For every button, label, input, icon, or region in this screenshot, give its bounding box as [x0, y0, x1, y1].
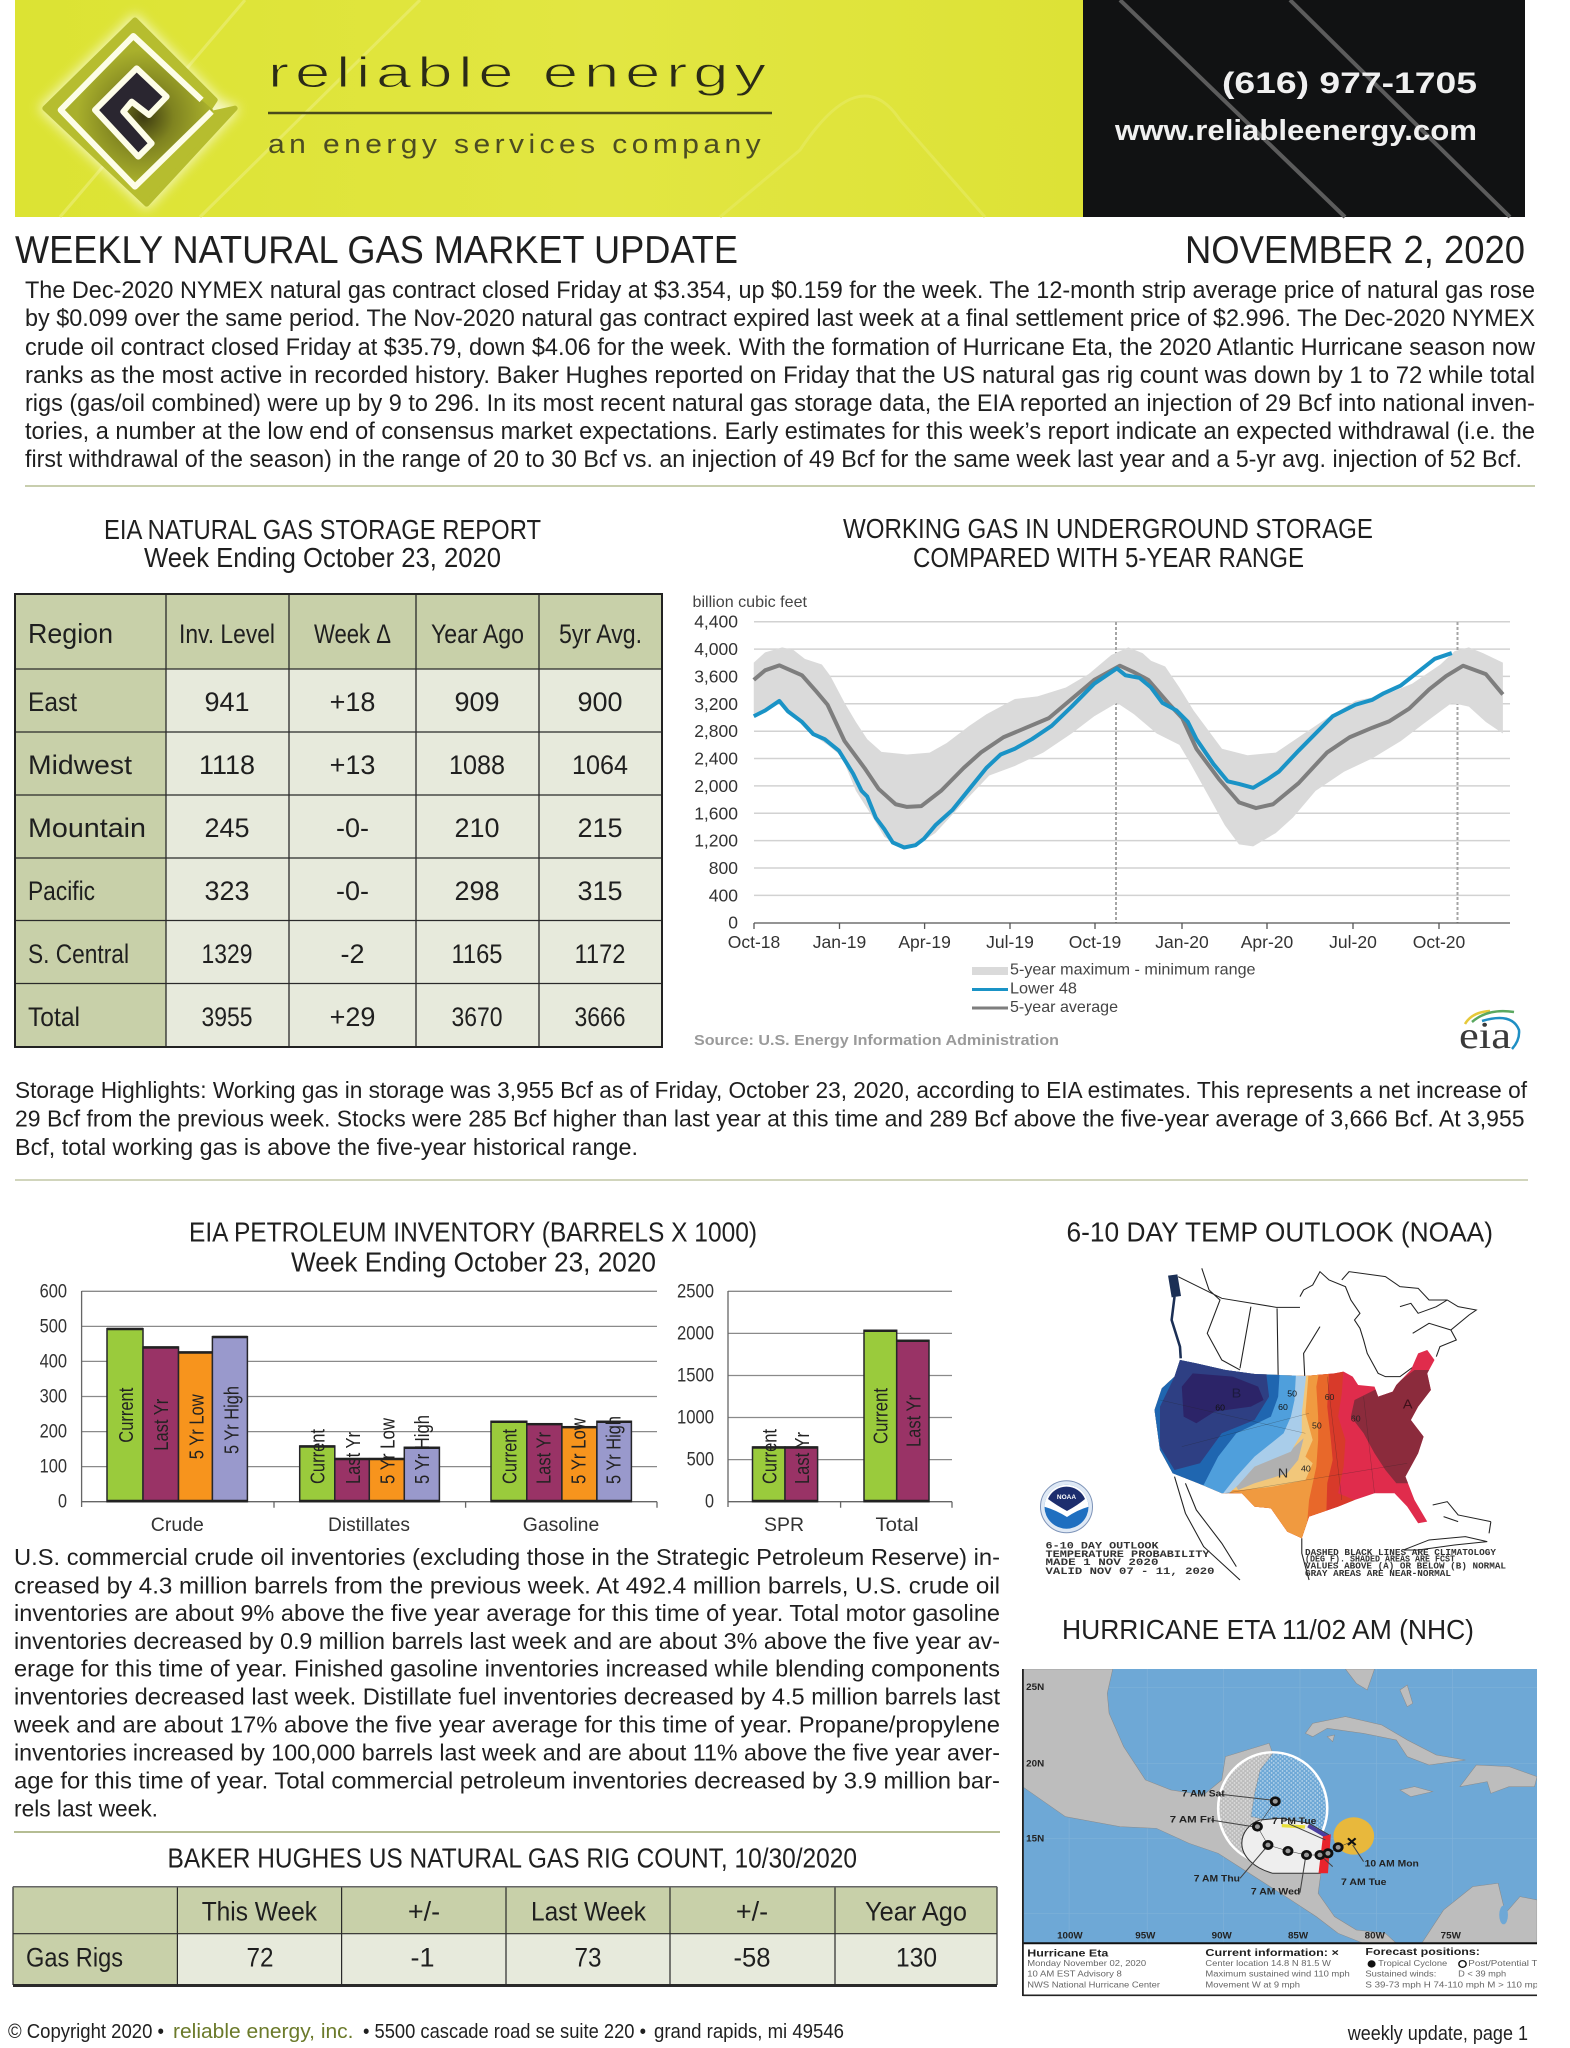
bar chart: crude, distillates, gasoline: 200 — [40, 1422, 67, 1443]
track time labels: 10 AM Mon — [1365, 1858, 1419, 1869]
table: storage report: East — [28, 687, 77, 717]
petroleum text block: inventories decreased last week. Distillate fuel inventories decreased by 4.5 million barrels last — [14, 1684, 1000, 1710]
chart legend: Lower 48 — [1010, 981, 1077, 998]
rotated bar labels: Current — [306, 1429, 330, 1484]
table: storage report: 1165 — [452, 939, 502, 969]
5-year range band — [754, 647, 1503, 846]
icon: NOAA logo — [1040, 1481, 1092, 1533]
rotated bar labels: Last Yr — [902, 1395, 926, 1447]
bars: gasoline — [491, 1421, 631, 1502]
table: storage report: 315 — [577, 876, 623, 906]
map caption right: (DEG F). SHADED AREAS ARE FCST — [1305, 1555, 1456, 1565]
map caption left — [1046, 1541, 1214, 1578]
table: rig count: -58 — [734, 1943, 770, 1973]
line chart: working gas in storage: 400 — [709, 885, 738, 905]
table: storage report: -2 — [340, 939, 365, 969]
hurricane info box: Post/Potential TC — [1468, 1958, 1545, 1968]
lat lon labels: 95W — [1135, 1930, 1156, 1940]
table: storage report: 5yr Avg. — [559, 619, 642, 649]
bar chart: SPR and total: 0 — [705, 1492, 714, 1513]
map caption left: TEMPERATURE PROBABILITY — [1046, 1550, 1210, 1561]
map: NOAA temperature outlook: 60 — [1278, 1402, 1288, 1412]
storage highlights text — [15, 1077, 1527, 1160]
map caption right — [1305, 1548, 1506, 1579]
intro text block: The Dec-2020 NYMEX natural gas contract closed Friday at $3.354, up $0.159 for the week. The 12-month strip average price of natural gas rose — [25, 277, 1535, 304]
heading: petroleum inventory: Week Ending October 23, 2020 — [291, 1247, 656, 1278]
chart legend — [972, 962, 1256, 1016]
storage highlights text: 29 Bcf from the previous week. Stocks were 285 Bcf higher than last year at this time and 289 Bcf above the five-year average of 3,666 Bcf. At 3,955 — [15, 1106, 1524, 1132]
bar chart: crude, distillates, gasoline: 600 — [40, 1281, 67, 1302]
table: rig count: 73 — [574, 1943, 602, 1973]
table: storage report: 909 — [454, 687, 500, 717]
storage highlights text: Storage Highlights: Working gas in storage was 3,955 Bcf as of Friday, October 23, 2020, according to EIA estimates. This represents a net increase of — [15, 1077, 1527, 1103]
hurricane info box: S 39-73 mph H 74-110 mph M > 110 mph — [1365, 1980, 1544, 1989]
table: storage report: S. Central — [28, 939, 129, 969]
table: storage report: 3955 — [202, 1002, 252, 1032]
table: storage report: 3670 — [452, 1002, 502, 1032]
hurricane info box: Tropical Cyclone — [1378, 1958, 1447, 1968]
bar chart: SPR and total: 500 — [687, 1450, 714, 1471]
line chart: working gas in storage: 2,400 — [694, 748, 738, 768]
rotated bar labels: 5 Yr Low — [568, 1418, 590, 1484]
heading: petroleum inventory — [189, 1217, 757, 1278]
rotated bar labels: Current — [498, 1429, 522, 1484]
table: storage report: 941 — [204, 687, 250, 717]
coastal warnings — [1282, 1824, 1305, 1829]
forecast cone — [1242, 1818, 1329, 1873]
map: NOAA temperature outlook: 60 — [1351, 1414, 1361, 1424]
rotated bar labels: Current — [758, 1429, 782, 1484]
intro text block: first withdrawal of the season) in the range of 20 to 30 Bcf vs. an injection of 49 Bcf for the same week last year and a 5-yr avg. injection of 52 Bcf. — [25, 446, 1522, 473]
table: storage report: 900 — [577, 687, 623, 717]
wind field — [1333, 1817, 1374, 1855]
table: storage report: 245 — [204, 813, 250, 843]
table: rig count: Last Week — [531, 1897, 646, 1927]
hurricane info box: Hurricane Eta — [1027, 1949, 1109, 1959]
footer copyright: grand rapids, mi 49546 — [654, 2020, 844, 2043]
bars: total — [864, 1330, 929, 1502]
petroleum text block — [13, 1544, 1000, 1822]
rotated bar labels: 5 Yr High — [220, 1386, 244, 1454]
table: rig count: +/- — [736, 1897, 768, 1927]
line chart: working gas in storage: 2,800 — [694, 721, 738, 741]
footer copyright: © Copyright 2020 • — [8, 2020, 164, 2043]
rotated bar labels — [115, 1386, 626, 1484]
map caption left: MADE 1 NOV 2020 — [1046, 1558, 1158, 1569]
bars: SPR — [752, 1447, 818, 1502]
rotated bar labels: Current — [115, 1387, 138, 1443]
bars: crude — [107, 1329, 247, 1502]
lat lon labels: 80W — [1365, 1930, 1385, 1940]
line chart: working gas in storage: Oct-18 — [728, 932, 780, 952]
hurricane info box: Maximum sustained wind 110 mph — [1205, 1969, 1350, 1979]
lat lon labels: 15N — [1026, 1833, 1044, 1844]
line chart: working gas in storage: 4,000 — [694, 639, 738, 659]
line chart: working gas in storage: 3,600 — [694, 666, 738, 686]
map: NOAA temperature outlook: 50 — [1287, 1389, 1297, 1399]
hurricane info box: Sustained winds: — [1365, 1969, 1436, 1979]
category labels: Crude — [151, 1515, 204, 1536]
heading: hurricane: HURRICANE ETA 11/02 AM (NHC) — [1062, 1614, 1474, 1645]
table: storage report: 1329 — [202, 939, 252, 969]
line chart: working gas in storage: 1,600 — [694, 803, 738, 823]
track time labels — [1170, 1788, 1419, 1896]
map: NOAA temperature outlook — [1040, 1268, 1506, 1580]
warm anomaly: maroon — [1351, 1370, 1436, 1483]
lat lon labels: 90W — [1212, 1930, 1232, 1940]
map caption right: VALUES ABOVE (A) OR BELOW (B) NORMAL — [1305, 1561, 1506, 1571]
lat lon labels: 20N — [1026, 1758, 1044, 1769]
table: storage report: 1172 — [574, 939, 626, 969]
heading: rig count: BAKER HUGHES US NATURAL GAS RIG COUNT, 10/30/2020 — [168, 1843, 857, 1874]
line chart: working gas in storage: billion cubic feet — [692, 594, 808, 611]
map caption right: DASHED BLACK LINES ARE CLIMATOLOGY — [1305, 1548, 1497, 1558]
table: rig count: 130 — [896, 1943, 937, 1973]
chart legend: 5-year maximum - minimum range — [1010, 962, 1256, 978]
rotated bar labels: Current — [870, 1388, 892, 1444]
rotated bar labels: Last Yr — [791, 1432, 814, 1484]
website: www.reliableenergy.com — [1114, 115, 1477, 147]
bars: distillates — [300, 1446, 439, 1502]
table: storage report: Year Ago — [431, 619, 524, 649]
line chart: working gas in storage: Apr-20 — [1241, 932, 1294, 952]
table: storage report: Week Δ — [314, 619, 391, 649]
map caption right: GRAY AREAS ARE NEAR-NORMAL — [1305, 1569, 1451, 1579]
intro text block: rigs (gas/oil combined) were up by 9 to 296. In its most recent natural gas storage data, the EIA reported an injection of 29 Bcf into national inven- — [25, 390, 1535, 417]
table: storage report: Mountain — [28, 813, 146, 843]
intro text block: tories, a number at the low end of consensus market expectations. Early estimates for this week’s report indicate an expected withdrawal (i.e. the — [25, 418, 1535, 445]
lat lon labels: 75W — [1441, 1930, 1461, 1940]
petroleum text block: week and are about 17% above the five year average for this time of year. Propane/propylene — [13, 1712, 1000, 1738]
intro text block — [25, 277, 1535, 473]
map: NOAA temperature outlook: A — [1403, 1396, 1413, 1411]
table: storage report: Midwest — [28, 750, 133, 780]
forecast position markers — [1253, 1798, 1342, 1859]
line chart: working gas in storage: Jul-19 — [986, 932, 1034, 952]
table: storage report: 1088 — [449, 750, 505, 780]
rotated bar labels: Last Yr — [342, 1432, 365, 1484]
line chart: working gas in storage: 800 — [709, 858, 738, 878]
track time labels: 7 AM Thu — [1194, 1873, 1240, 1884]
hurricane info box: Center location 14.8 N 81.5 W — [1205, 1958, 1331, 1968]
table: rig count: +/- — [408, 1897, 440, 1927]
rotated bar labels — [758, 1388, 926, 1484]
company tagline: an energy services company — [268, 129, 765, 159]
heading: temp outlook: 6-10 DAY TEMP OUTLOOK (NOAA) — [1066, 1217, 1493, 1248]
icon: company logo — [38, 13, 240, 210]
line chart: working gas in storage: Oct-20 — [1413, 932, 1466, 952]
map: NOAA temperature outlook: B — [1232, 1385, 1241, 1400]
bar chart: crude, distillates, gasoline: 0 — [58, 1492, 67, 1513]
petroleum text block: erage for this time of year. Finished gasoline inventories increased while blending components — [14, 1656, 1000, 1682]
hurricane info box: Monday November 02, 2020 — [1027, 1958, 1146, 1968]
company name: reliable energy — [268, 49, 772, 97]
map: NOAA temperature outlook: 40 — [1301, 1464, 1311, 1474]
footer copyright: reliable energy, inc. — [173, 2020, 354, 2043]
heading: working gas chart — [843, 513, 1373, 573]
hurricane info box: 10 AM EST Advisory 8 — [1027, 1969, 1122, 1979]
map: NOAA temperature outlook: 60 — [1215, 1403, 1225, 1413]
petroleum text block: rels last week. — [14, 1796, 158, 1822]
category labels: Gasoline — [523, 1515, 599, 1536]
table: rig count: Gas Rigs — [26, 1943, 123, 1973]
table: storage report: +13 — [330, 750, 375, 780]
map caption left: 6-10 DAY OUTLOOK — [1046, 1541, 1158, 1552]
heading: working gas chart: WORKING GAS IN UNDERGROUND STORAGE — [843, 513, 1373, 544]
table: storage report — [15, 594, 662, 1047]
table: rig count: Year Ago — [865, 1897, 967, 1927]
track time labels: 7 AM Sat — [1182, 1788, 1226, 1799]
bar chart: crude, distillates, gasoline: 100 — [40, 1457, 67, 1478]
petroleum text block: age for this time of year. Total commercial petroleum inventories decreased by 3.9 million bar- — [14, 1768, 1000, 1794]
petroleum text block: creased by 4.3 million barrels from the previous week. At 492.4 million barrels, U.S. crude oil — [14, 1572, 1000, 1598]
lat lon labels: 85W — [1288, 1930, 1308, 1940]
rotated bar labels: 5 Yr High — [411, 1415, 434, 1484]
icon: NOAA logo: NOAA — [1057, 1494, 1076, 1501]
table: storage report: 323 — [204, 876, 250, 906]
header banner — [15, 0, 1525, 217]
table: storage report: Total — [28, 1002, 80, 1032]
intro text block: crude oil contract closed Friday at $35.79, down $4.06 for the week. With the formation of Hurricane Eta, the 2020 Atlantic Hurricane season now — [25, 334, 1535, 361]
intro text block: ranks as the most active in recorded history. Baker Hughes reported on Friday that the US natural gas rig count was down by 1 to 72 while total — [25, 362, 1535, 389]
table: rig count: This Week — [202, 1897, 317, 1927]
wind probability circle — [1218, 1752, 1327, 1864]
rotated bar labels: 5 Yr Low — [186, 1394, 208, 1459]
track time labels: 7 AM Tue — [1341, 1876, 1387, 1887]
bar chart: crude, distillates, gasoline: 300 — [40, 1386, 67, 1408]
line chart: working gas in storage: Oct-19 — [1069, 932, 1121, 952]
bar chart: crude, distillates, gasoline — [40, 1281, 657, 1536]
5-year average line — [754, 665, 1503, 808]
icon: eia logo — [1459, 1011, 1519, 1057]
Lower 48 line — [754, 653, 1452, 847]
heading: storage report: EIA NATURAL GAS STORAGE REPORT — [104, 514, 541, 545]
bar chart: SPR and total: 1000 — [677, 1408, 714, 1428]
table: storage report: 1064 — [572, 750, 628, 780]
lat lon labels: 25N — [1026, 1681, 1044, 1692]
map: NOAA temperature outlook: 60 — [1325, 1392, 1335, 1402]
bar chart: SPR and total: 2000 — [677, 1323, 714, 1344]
lat lon labels: 100W — [1057, 1930, 1083, 1940]
category labels: Distillates — [328, 1515, 410, 1536]
chart source: Source: U.S. Energy Information Administration — [694, 1032, 1059, 1049]
line chart: working gas in storage: 0 — [728, 913, 738, 933]
icon: eia logo: eia — [1459, 1015, 1511, 1057]
rotated bar labels: Last Yr — [532, 1432, 556, 1484]
table: storage report: 3666 — [574, 1002, 626, 1032]
line chart: working gas in storage: 3,200 — [694, 694, 738, 714]
map: NOAA temperature outlook: N — [1278, 1465, 1288, 1480]
hurricane info box: Forecast positions: — [1365, 1947, 1480, 1958]
chart legend: 5-year average — [1010, 999, 1118, 1016]
table: storage report: Inv. Level — [179, 619, 275, 649]
table: storage report: 215 — [577, 813, 623, 843]
category labels: SPR — [764, 1515, 804, 1536]
table: storage report: +29 — [330, 1002, 375, 1032]
line chart: working gas in storage — [692, 594, 1519, 1057]
storm track lines — [1211, 1794, 1364, 1893]
footer copyright — [8, 2020, 844, 2043]
date: NOVEMBER 2, 2020 — [1185, 229, 1525, 272]
footer copyright: • 5500 cascade road se suite 220 • — [363, 2020, 646, 2043]
table: storage report: 210 — [454, 813, 500, 843]
bar chart: crude, distillates, gasoline: 400 — [40, 1351, 67, 1372]
track time labels: 7 AM Wed — [1251, 1886, 1301, 1896]
lat lon labels — [1026, 1681, 1461, 1940]
rotated bar labels: 5 Yr High — [602, 1416, 626, 1484]
track time labels: 7 PM Tue — [1272, 1815, 1316, 1826]
table: rig count — [13, 1887, 997, 1986]
category labels — [151, 1515, 599, 1536]
footer page number: weekly update, page 1 — [1347, 2022, 1528, 2045]
title: WEEKLY NATURAL GAS MARKET UPDATE — [15, 229, 738, 272]
phone number: (616) 977-1705 — [1222, 67, 1477, 100]
line chart: working gas in storage: Apr-19 — [898, 932, 951, 952]
line chart: working gas in storage: 4,400 — [694, 612, 738, 632]
table: storage report: 298 — [454, 876, 500, 906]
petroleum text block: U.S. commercial crude oil inventories (excluding those in the Strategic Petroleum Reserve) in- — [14, 1544, 1000, 1570]
line chart: working gas in storage: Jan-20 — [1155, 932, 1209, 952]
storage highlights text: Bcf, total working gas is above the five-year historical range. — [15, 1134, 638, 1160]
line chart: working gas in storage: Jan-19 — [813, 932, 866, 952]
bar chart: crude, distillates, gasoline: 500 — [40, 1316, 67, 1337]
table: rig count: -1 — [410, 1943, 435, 1973]
bar chart: SPR and total — [677, 1281, 952, 1536]
table: storage report: Pacific — [28, 876, 95, 906]
table: storage report: -0- — [336, 876, 369, 906]
hurricane info box — [1023, 1943, 1545, 1995]
line chart: working gas in storage: 1,200 — [694, 831, 738, 851]
line chart: working gas in storage: 2,000 — [694, 776, 738, 796]
map caption left: VALID NOV 07 - 11, 2020 — [1046, 1567, 1214, 1578]
heading: storage report — [104, 514, 541, 573]
table: storage report: 1118 — [199, 750, 255, 780]
petroleum text block: inventories increased by 100,000 barrels last week and are about 11% above the five year aver- — [14, 1740, 1000, 1766]
map: hurricane track — [1023, 1669, 1545, 1996]
table: storage report: -0- — [336, 813, 369, 843]
bar chart: SPR and total: 2500 — [677, 1281, 714, 1302]
rotated bar labels: 5 Yr Low — [376, 1418, 400, 1484]
petroleum text block: inventories are about 9% above the five year average for this time of year. Total motor gasoline — [14, 1600, 1000, 1626]
track time labels: 7 AM Fri — [1170, 1814, 1215, 1824]
table: storage report: +18 — [330, 687, 375, 717]
heading: storage report: Week Ending October 23, 2020 — [144, 542, 501, 573]
map: NOAA temperature outlook: 50 — [1312, 1421, 1322, 1430]
table: rig count: 72 — [246, 1943, 274, 1973]
hurricane info box: NWS National Hurricane Center — [1027, 1980, 1160, 1990]
land masses — [1023, 1669, 1537, 1943]
bar chart: SPR and total: 1500 — [677, 1366, 714, 1386]
category labels: Total — [876, 1515, 918, 1536]
line chart: working gas in storage: Jul-20 — [1329, 932, 1377, 952]
cold anomaly bands — [1233, 1438, 1304, 1490]
hurricane info box: D < 39 mph — [1458, 1969, 1506, 1979]
rotated bar labels: Last Yr — [150, 1399, 173, 1451]
petroleum text block: inventories decreased by 0.9 million barrels last week and are about 3% above the five year av- — [14, 1628, 1000, 1654]
category labels — [764, 1515, 918, 1536]
heading: petroleum inventory: EIA PETROLEUM INVENTORY (BARRELS X 1000) — [189, 1217, 757, 1248]
hurricane info box: Current information: × — [1205, 1948, 1339, 1959]
heading: working gas chart: COMPARED WITH 5-YEAR RANGE — [913, 542, 1304, 573]
table: storage report: Region — [28, 618, 113, 649]
hurricane info box: Movement W at 9 mph — [1205, 1980, 1300, 1989]
intro text block: by $0.099 over the same period. The Nov-2020 natural gas contract expired last week at a final settlement price of $2.996. The Dec-2020 NYMEX — [25, 305, 1535, 332]
